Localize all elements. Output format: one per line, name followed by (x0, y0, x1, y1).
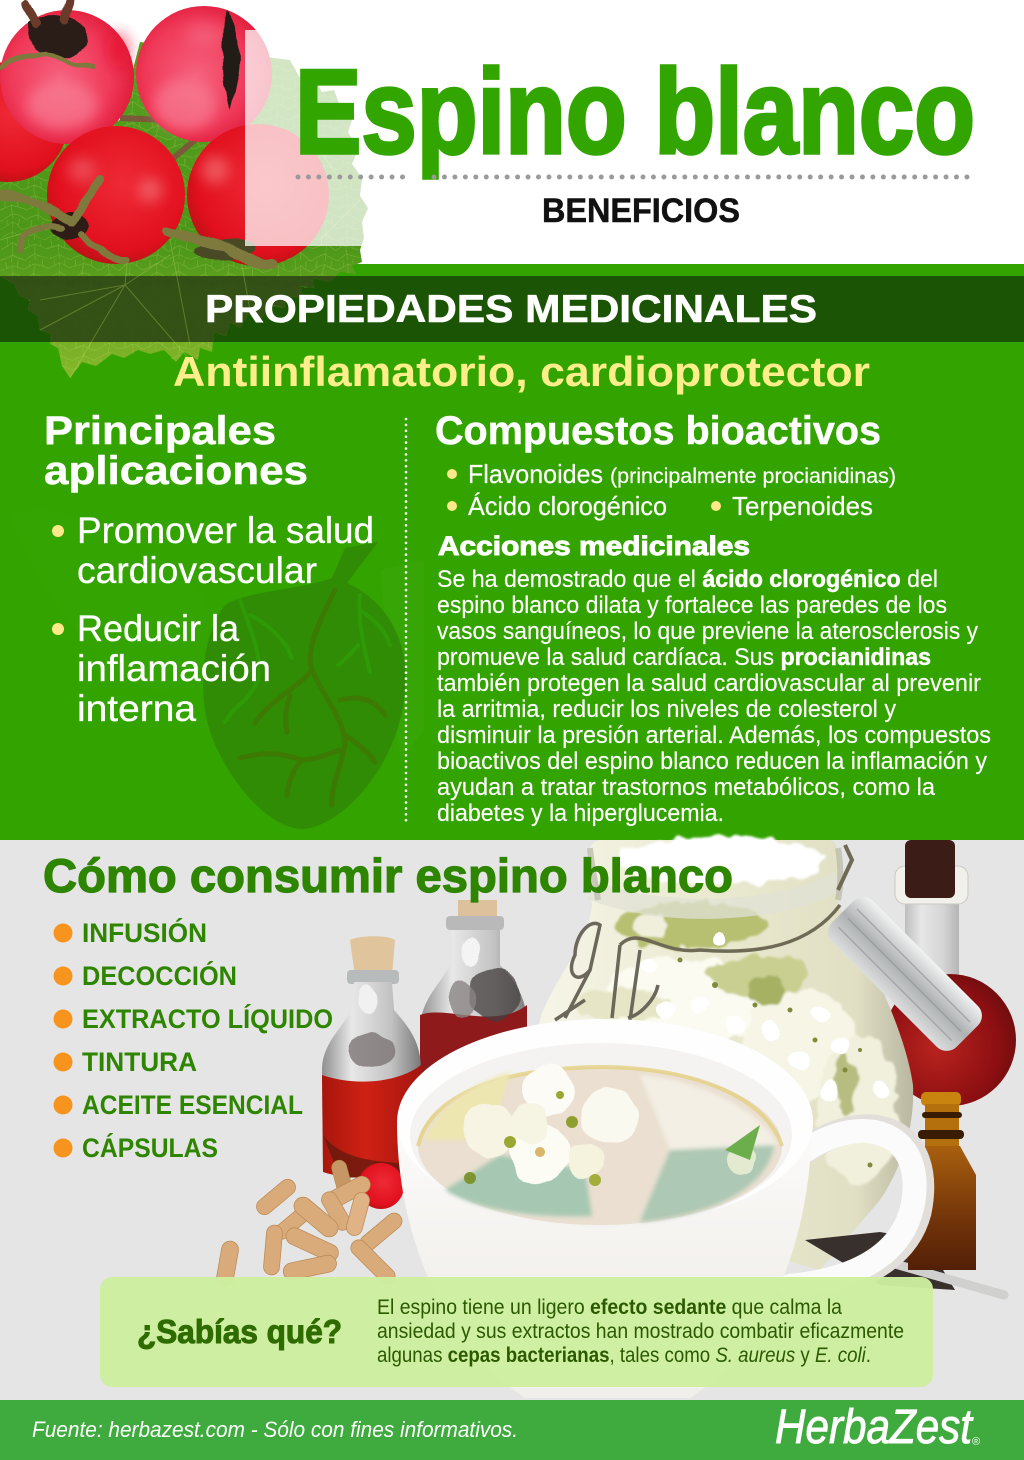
paragraph: acciones (437, 566, 991, 827)
white veil over image (245, 30, 1024, 246)
compounds list: Flavonoides (468, 459, 603, 489)
compounds list: (principalmente procianidinas) (610, 465, 896, 488)
image: dropper (805, 1232, 1004, 1295)
image: capsules (215, 1159, 405, 1288)
section heading: cómo consumir: Cómo consumir espino blanco (43, 849, 733, 902)
band heading: PROPIEDADES MEDICINALES (205, 288, 817, 331)
tagline: Antiinflamatorio, cardioprotector (173, 348, 870, 395)
image: leaf (0, 42, 368, 378)
bullet two: Reducir la (77, 608, 239, 649)
heading: aplicaciones (44, 449, 308, 493)
consumption list: ACEITE ESENCIAL (82, 1090, 303, 1120)
callout text (377, 1296, 904, 1367)
subtitle: BENEFICIOS (542, 192, 740, 230)
image: bottle two (420, 900, 527, 1090)
callout text: algunas cepas bacterianas, tales como S. aureus y E. coli. (377, 1344, 871, 1367)
image: teacup with infusion (397, 1019, 921, 1398)
panel: propiedades background (0, 264, 1024, 840)
paragraph: acciones: también protegen la salud cardiovascular al prevenir (437, 670, 981, 697)
bullet one: Promover la salud (77, 510, 374, 551)
consumption list: DECOCCIÓN (82, 960, 237, 991)
consumption list (54, 917, 333, 1163)
heading (44, 409, 308, 493)
paragraph: acciones: disminuir la presión arterial. Además, los compuestos (437, 722, 991, 749)
bullet one (52, 510, 374, 591)
bullet two (52, 608, 271, 729)
callout text: ansiedad y sus extractos han mostrado combatir eficazmente (377, 1320, 904, 1343)
image: flask with stopper (884, 840, 1016, 1106)
callout text: El espino tiene un ligero efecto sedante que calma la (377, 1296, 842, 1319)
bullet two: inflamación (77, 648, 271, 689)
image: bottle one (322, 936, 421, 1178)
image: amber bottle (908, 1092, 976, 1270)
column: principales aplicaciones (44, 409, 374, 729)
heart illustration (10, 510, 424, 829)
image: jar lid (822, 891, 988, 1057)
subheading: Acciones medicinales (438, 531, 750, 561)
image: red berry (358, 1163, 404, 1209)
consumption list: INFUSIÓN (82, 917, 207, 948)
callout: sabías qué (100, 1277, 933, 1387)
consumption list: TINTURA (82, 1047, 197, 1077)
compounds list: Ácido clorogénico (468, 491, 667, 521)
paragraph: acciones: vasos sanguíneos, lo que previene la aterosclerosis y (437, 618, 978, 645)
paragraph: acciones: ayudan a tratar trastornos metabólicos, como la (437, 774, 936, 801)
paragraph: acciones: promueve la salud cardíaca. Sus procianidinas (437, 644, 931, 671)
image: glass jar with flowers (537, 836, 913, 1270)
heading: Principales (44, 409, 276, 453)
callout heading: ¿Sabías qué? (137, 1313, 342, 1350)
logo: HerbaZest (775, 1401, 973, 1454)
paragraph: acciones: espino blanco dilata y fortalece las paredes de los (437, 592, 947, 619)
paragraph: acciones: la arritmia, reducir los niveles de colesterol y (437, 696, 896, 723)
bullet one: cardiovascular (77, 550, 317, 591)
paragraph: acciones: bioactivos del espino blanco reducen la inflamación y (437, 748, 987, 775)
band: propiedades medicinales (0, 276, 1024, 342)
consumption list: CÁPSULAS (82, 1132, 218, 1163)
logo: ® (972, 1436, 980, 1448)
paragraph: acciones: diabetes y la hiperglucemia. (437, 800, 724, 827)
column divider (405, 419, 407, 822)
source note: Fuente: herbazest.com - Sólo con fines informativos. (32, 1417, 518, 1442)
paragraph: acciones: Se ha demostrado que el ácido clorogénico del (437, 566, 938, 593)
footer (0, 1400, 1024, 1460)
compounds list: Terpenoides (732, 491, 873, 521)
column: compuestos bioactivos (435, 409, 991, 827)
heading: Compuestos bioactivos (435, 409, 881, 453)
panel: consumption background (0, 840, 1024, 1400)
dotted rule (298, 174, 973, 180)
page background (0, 0, 1024, 264)
consumption list: EXTRACTO LÍQUIDO (82, 1003, 333, 1034)
compounds list (447, 459, 896, 521)
image: hawthorn berries (0, 2, 329, 266)
bullet two: interna (77, 688, 196, 729)
